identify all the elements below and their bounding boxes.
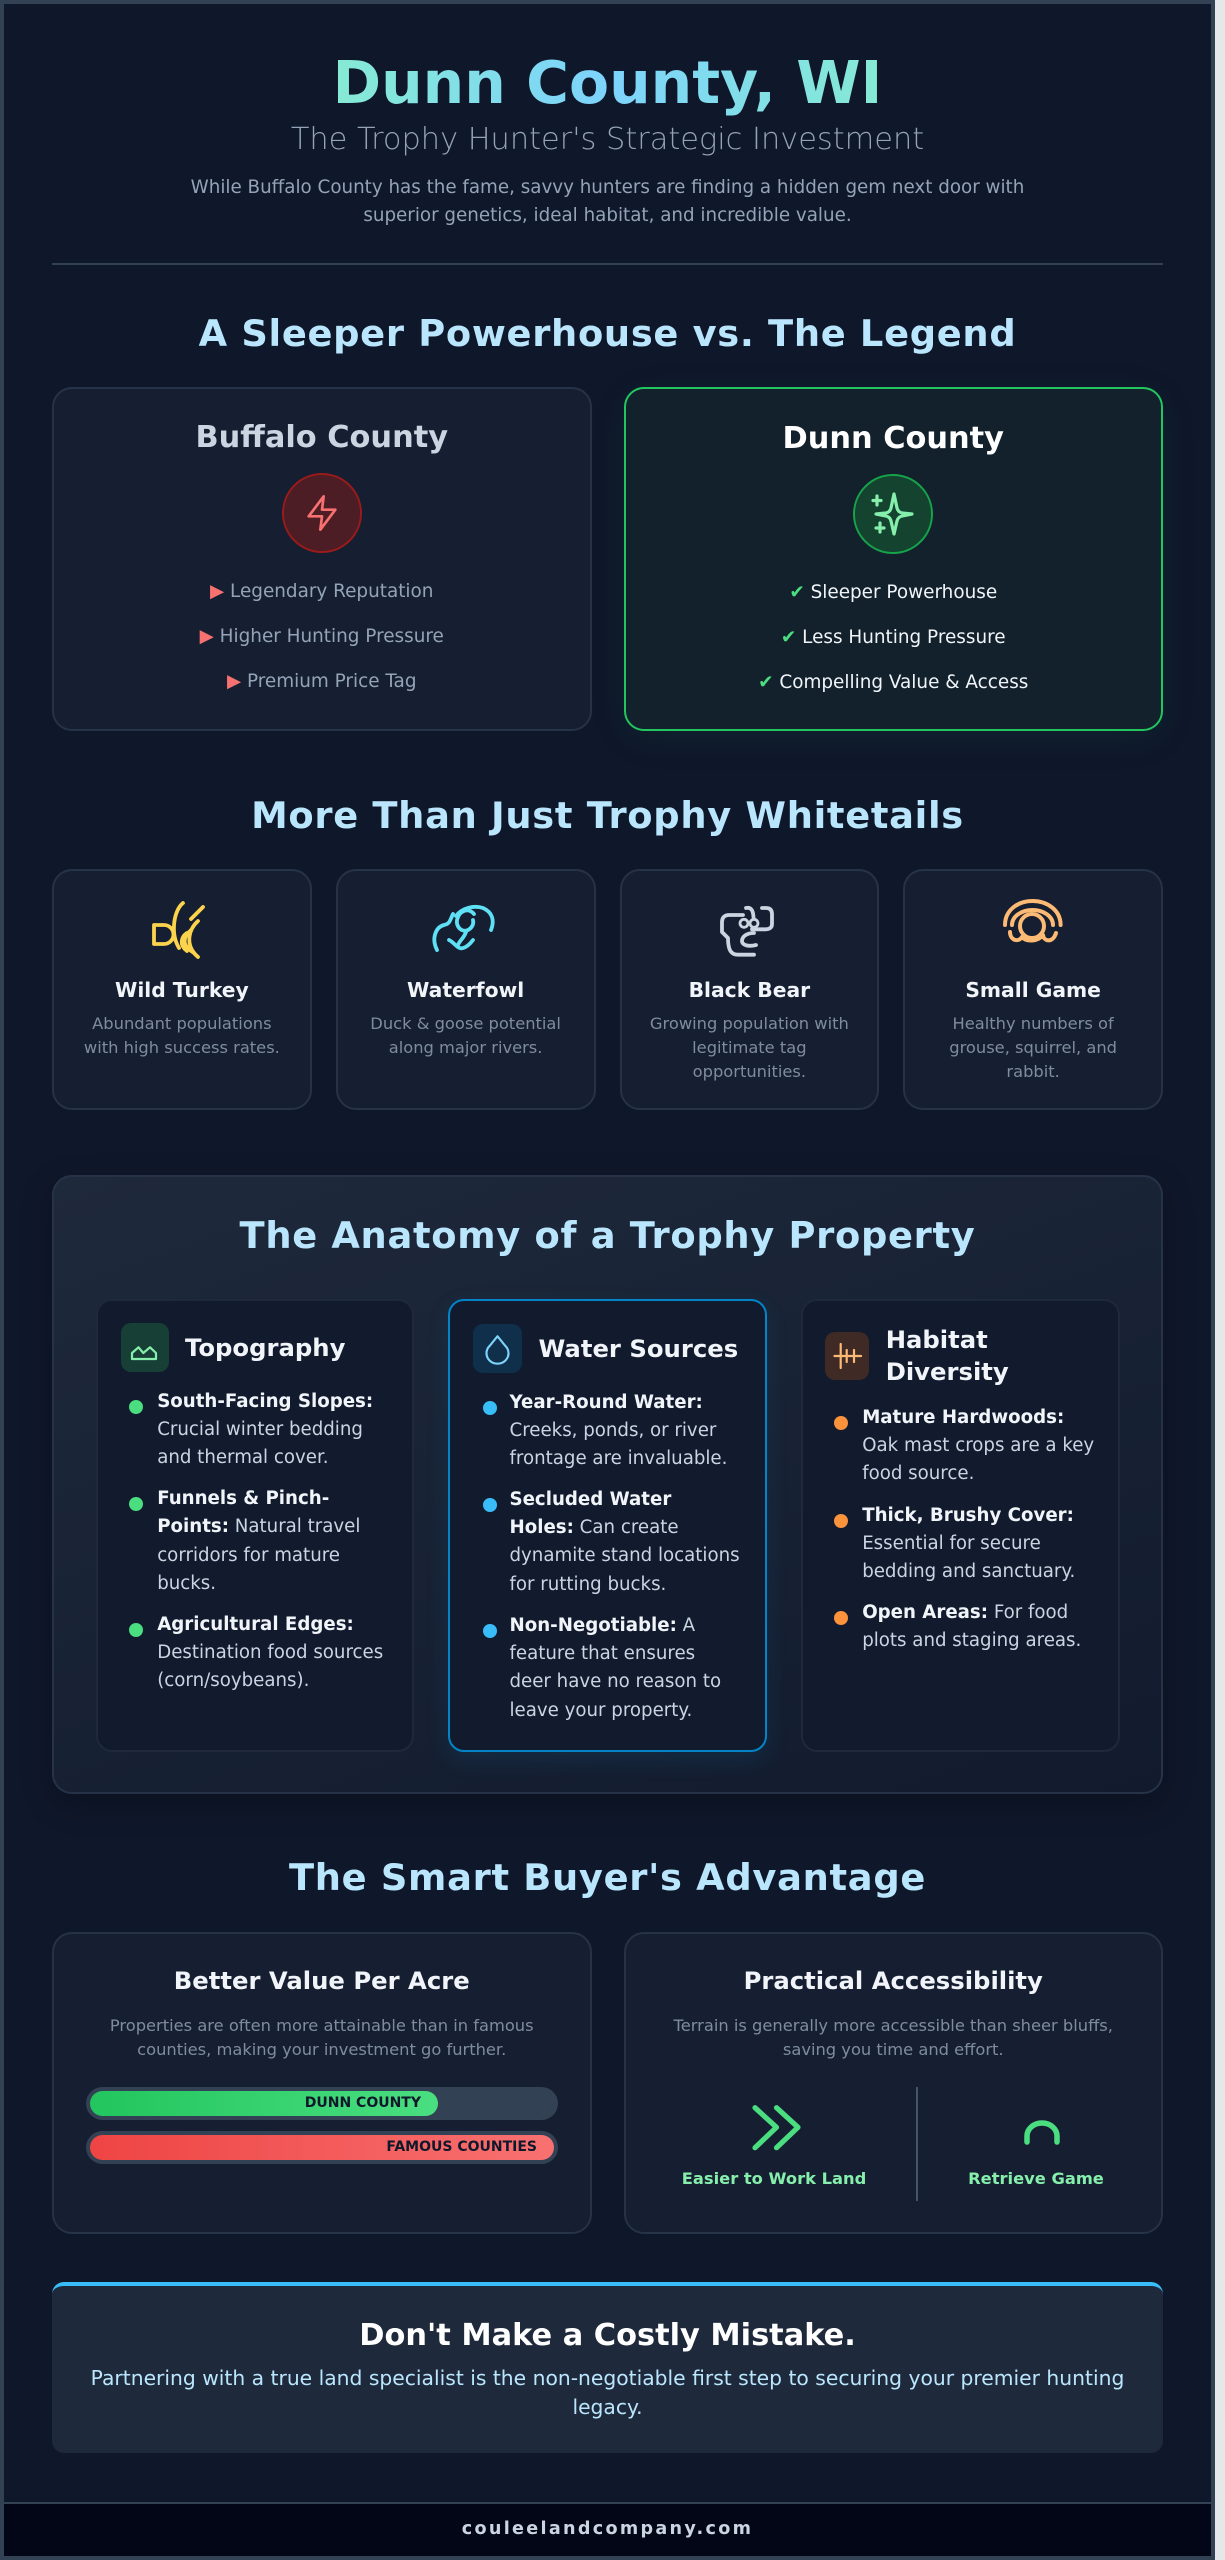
bullet: leave your property. [510,1700,692,1721]
heading: Topography [185,1332,345,1362]
bullet: Funnels & Pinch- [157,1488,329,1509]
heading: Water Sources [538,1334,738,1362]
bullet [834,1406,1094,1484]
icon: sparkles [853,474,933,554]
heading: Buffalo County: Buffalo County [195,420,448,455]
bullet: Oak mast crops are a key [862,1435,1094,1456]
sub-panel: Habitat Diversity [801,1298,1120,1752]
description: counties, making your investment go further. [137,2040,506,2059]
bullet [483,1614,721,1721]
description: Terrain is generally more accessible than sheer bluffs, [674,2016,1113,2035]
heading: sleeper powerhouse: A Sleeper Powerhouse vs. The Legend [199,312,1016,354]
list: Dunn advantages: ✔ Less Hunting Pressure [781,627,1006,648]
bullet: Points: Natural travel [157,1516,360,1537]
heading: Habitat [886,1324,988,1354]
description: legitimate tag [692,1038,807,1057]
bullet: dynamite stand locations [510,1545,740,1566]
icon: habitat [825,1332,869,1380]
bullet: Creeks, ponds, or river [510,1420,716,1441]
bullet: Non-Negotiable: A [510,1614,695,1636]
bullet: feature that ensures [510,1643,695,1664]
list: Buffalo drawbacks [200,581,444,692]
list: Dunn advantages [758,582,1028,693]
bullet [129,1488,360,1594]
heading: smart buyer: The Smart Buyer's Advantage [289,1856,926,1899]
panel: practical accessibility [624,1932,1163,2234]
label: Small Game [965,978,1101,1002]
heading: Practical Accessibility [744,1966,1043,1994]
bar: Dunn County [86,2087,558,2120]
bullet: plots and staging areas. [862,1630,1081,1651]
description: opportunities. [693,1062,806,1081]
bar: Famous Counties [86,2131,558,2164]
heading: more than whitetails: More Than Just Trophy Whitetails [251,794,964,836]
panel: Small Game [903,869,1163,1110]
description: grouse, squirrel, and [949,1038,1117,1057]
bullet: Open Areas: For food [862,1602,1068,1622]
label: easier to work land: Easier to Work Land [682,2169,866,2188]
bullet: Secluded Water [510,1488,671,1510]
bullet [129,1390,373,1468]
panel: anatomy of a trophy property [52,1175,1163,1794]
bullet [834,1602,1081,1651]
bullet: Agricultural Edges: [157,1614,354,1634]
panel: Wild Turkey [52,869,312,1110]
sub-panel: Topography [96,1298,414,1752]
list: Buffalo drawbacks: ▶ Higher Hunting Pressure [200,626,444,647]
panel: Black Bear [620,869,879,1110]
bullet: South-Facing Slopes: [157,1390,373,1412]
heading: Dunn County: Dunn County [782,421,1004,456]
subtitle: The Trophy Hunter's Strategic Investment [291,122,924,157]
bullet: Mature Hardwoods: [862,1406,1064,1428]
description: Healthy numbers of [953,1014,1114,1033]
label: Black Bear [689,978,810,1002]
icon: turkey [152,901,205,959]
intro paragraph [191,177,1024,226]
bullet: frontage are invaluable. [510,1448,727,1469]
icon: arc [1024,2120,1060,2145]
description: Duck & goose potential [370,1014,561,1033]
bullet: Destination food sources [157,1642,383,1663]
bullet: bucks. [157,1573,216,1594]
panel: Dunn County [624,387,1163,731]
heading: Better Value Per Acre [174,1966,470,1994]
heading: Don't Make a Costly Mistake. [359,2318,856,2353]
bar: Dunn County: DUNN COUNTY [305,2095,421,2111]
bar: Famous Counties: FAMOUS COUNTIES [386,2139,537,2155]
bullet: Thick, Brushy Cover: [862,1504,1074,1526]
header [191,49,1024,226]
bullet: corridors for mature [157,1545,340,1566]
label: retrieve game: Retrieve Game [968,2169,1104,2188]
bullet [129,1614,383,1691]
text: Partnering with a true land specialist is the non-negotiable first step to securing your premier hunting [91,2366,1124,2390]
description: with high success rates. [84,1038,280,1057]
heading [886,1324,1009,1386]
description [673,2016,1113,2059]
list: Dunn advantages: ✔ Sleeper Powerhouse [789,582,997,603]
description [650,1014,849,1081]
footer url: couleelandcompany.com [462,2519,753,2539]
bullet [483,1392,727,1469]
icon: topography [121,1322,169,1372]
bullet: Essential for secure [862,1533,1041,1554]
description [949,1014,1117,1081]
icon: chevrons [752,2105,801,2150]
bullet: and thermal cover. [157,1447,329,1468]
footer [4,2502,1211,2556]
description: Growing population with [650,1014,849,1033]
icon: small game [1003,899,1063,942]
heading: anatomy: The Anatomy of a Trophy Property [240,1214,975,1257]
bullet: (corn/soybeans). [157,1670,309,1691]
icon: lightning [282,473,362,553]
bullet [834,1504,1075,1582]
bullet: Year-Round Water: [510,1392,703,1412]
description: saving you time and effort. [783,2040,1004,2059]
bullet [483,1488,740,1595]
icon: bear [720,906,774,957]
bullet: for rutting bucks. [510,1574,666,1595]
heading: Diversity [886,1357,1009,1386]
description [110,2016,534,2059]
text: legacy. [572,2394,643,2418]
description [370,1014,561,1057]
bullet: food source. [862,1463,974,1484]
text [91,2366,1124,2418]
title: Dunn County, WI [333,49,882,117]
intro paragraph: superior genetics, ideal habitat, and incredible value. [363,205,852,226]
intro paragraph: While Buffalo County has the fame, savvy hunters are finding a hidden gem next door with [191,177,1024,198]
list: Buffalo drawbacks: ▶ Premium Price Tag [227,671,417,692]
bullet: Crucial winter bedding [157,1419,363,1440]
description: along major rivers. [389,1038,542,1057]
description: rabbit. [1006,1062,1060,1081]
bullet: bedding and sanctuary. [862,1561,1075,1582]
description [84,1014,280,1057]
icon: waterfowl [432,904,495,952]
bullet: deer have no reason to [510,1671,721,1692]
list: Buffalo drawbacks: ▶ Legendary Reputation [210,581,433,602]
label: Wild Turkey [115,978,249,1002]
sub-panel: Water Sources [448,1298,767,1752]
icon: water drop [473,1324,522,1372]
description: Abundant populations [92,1014,272,1033]
callout: call to action [52,2282,1163,2453]
panel: Waterfowl [336,869,596,1110]
bullet: Holes: Can create [510,1517,679,1538]
panel: better value [52,1932,592,2234]
bar chart: value comparison [86,2087,558,2164]
description: Properties are often more attainable than in famous [110,2016,534,2035]
list: Dunn advantages: ✔ Compelling Value & Access [758,672,1028,693]
label: Waterfowl [407,978,524,1002]
panel: Buffalo County [52,387,592,731]
